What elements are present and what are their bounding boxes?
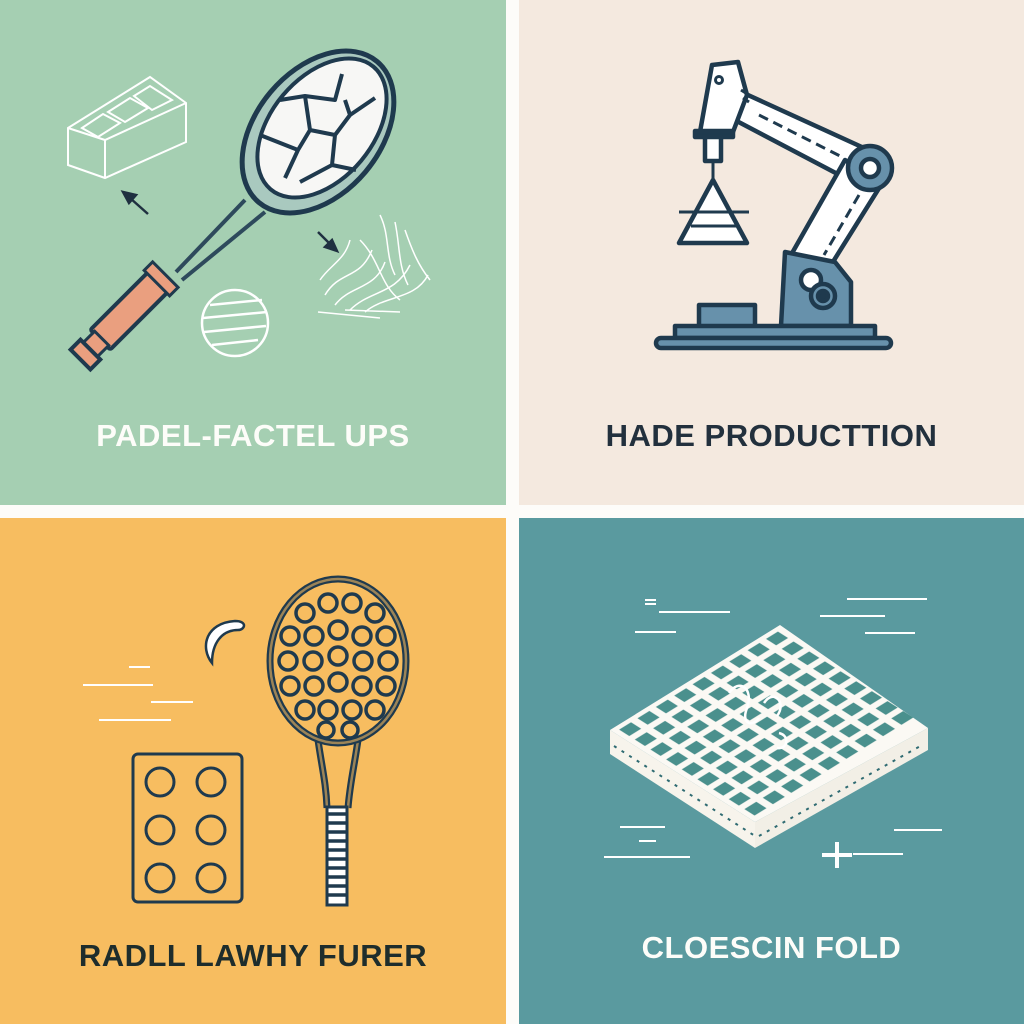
icon: robotic arm — [654, 60, 894, 350]
icon: racket — [68, 22, 425, 372]
elbow — [848, 146, 892, 190]
panel: bottom-left orange — [0, 518, 506, 1024]
wrist — [700, 62, 747, 132]
icon: isometric grid court — [610, 625, 928, 848]
forearm — [791, 160, 881, 265]
icon: fibers — [318, 215, 430, 318]
panel: top-right cream — [519, 0, 1024, 505]
icon: racket — [270, 579, 406, 905]
speed lines — [83, 667, 193, 720]
arrow: down-right — [318, 232, 337, 251]
icon: plus — [822, 842, 852, 868]
gripper triangle — [679, 180, 747, 243]
upper arm — [731, 90, 864, 180]
speed lines — [604, 599, 942, 857]
panel: bottom-right teal — [519, 518, 1024, 1024]
heading: PADEL-FACTEL UPS — [96, 418, 410, 453]
icon: tile with circles — [133, 754, 242, 902]
icon: crescent — [206, 621, 244, 663]
heading: CLOESCIN FOLD — [642, 930, 901, 965]
base tower — [781, 252, 851, 326]
heading: HADE PRODUCTTION — [606, 418, 937, 453]
base — [699, 305, 755, 330]
panel: top-left green — [0, 0, 506, 505]
heading: RADLL LAWHY FURER — [79, 938, 427, 973]
arrow: up-left — [123, 192, 148, 214]
icon: brick — [68, 77, 186, 178]
icon: ball — [202, 290, 268, 356]
